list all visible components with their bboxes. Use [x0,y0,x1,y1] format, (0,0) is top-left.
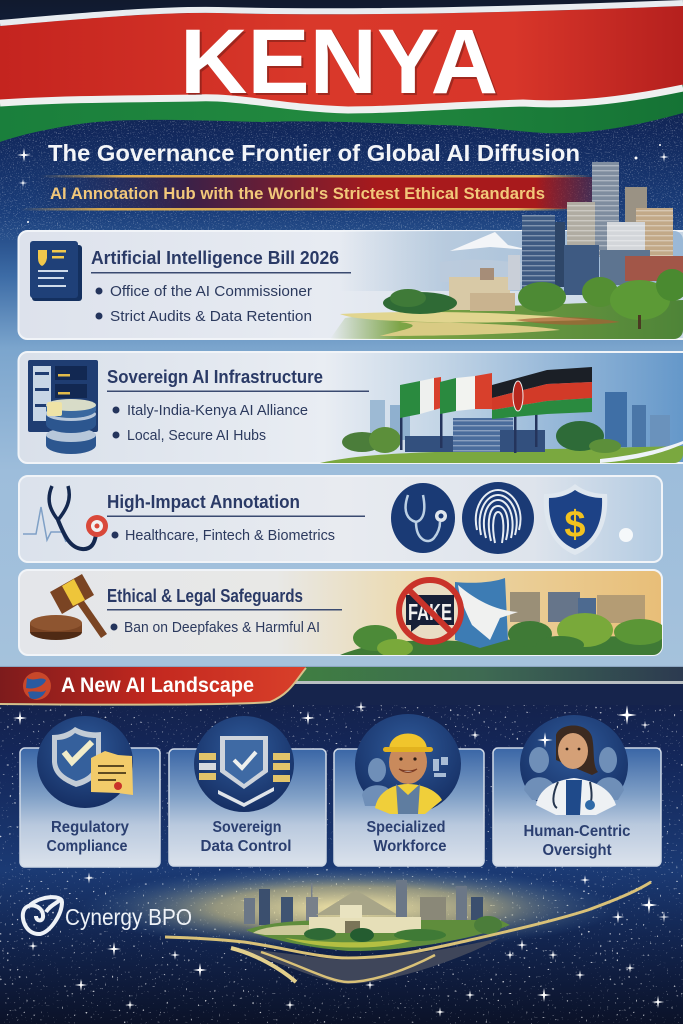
label [366,819,447,855]
icon: server and database [28,360,98,454]
title: KENYA [180,11,498,113]
bullet list: Local, Secure AI Hubs [127,427,266,444]
icon: shield and certificate [37,716,133,808]
skyline [244,880,483,925]
icon: no fake [399,580,461,642]
icon: torn shield [455,578,518,648]
subtitle: The Governance Frontier of Global AI Diffusion [48,140,580,166]
label [200,819,292,855]
card: Regulatory Compliance [20,716,160,867]
horizon scene [80,866,651,984]
card: Sovereign Data Control [169,716,326,866]
icon: document [30,241,82,301]
scene: buildings and trees [340,592,666,657]
icon: doctor portrait [520,715,628,815]
panel: High-Impact Annotation [19,476,662,562]
icon: dollar shield: $ [564,504,586,546]
card: Specialized Workforce [334,714,484,866]
panel frame [19,570,662,655]
icon: fingerprint badge [462,482,534,554]
tagline ribbon [20,175,592,210]
icon: globe [23,672,51,700]
panel frame [19,476,662,562]
label: Regulatory [51,819,129,836]
flag banner [0,3,683,142]
label: Oversight [542,842,612,859]
panel: Artificial Intelligence Bill 2026 [18,162,683,339]
bullet list: Strict Audits & Data Retention [110,308,312,325]
label [46,819,129,855]
bullet text: Healthcare, Fintech & Biometrics [125,527,335,544]
logo text: Cynergy BPO [65,904,192,930]
icon: dollar shield [544,484,607,555]
section heading: A New AI Landscape [61,674,254,697]
label [524,823,631,859]
ground and trees [246,920,510,951]
road curves [165,882,651,982]
icon: worker portrait [355,714,461,814]
panel: Sovereign AI Infrastructure [18,352,683,463]
label: Sovereign [212,819,282,836]
heading: Artificial Intelligence Bill 2026 [91,248,339,268]
icon: gavel [30,574,107,640]
title: KENYA [182,13,500,115]
heading: Sovereign AI Infrastructure [107,367,323,387]
logo mark [23,897,62,934]
flags [400,367,592,453]
label: Data Control [200,838,292,855]
logo: Cynergy BPO [23,897,192,934]
label: Specialized [366,819,446,836]
decorative stars upper [17,144,669,223]
skyline and ground [320,392,683,463]
bullet list: Italy-India-Kenya AI Alliance [127,402,308,419]
stars lower [13,701,670,1017]
bullet text: Ban on Deepfakes & Harmful AI [124,619,320,636]
landscape scene [330,231,683,339]
heading: Ethical & Legal Safeguards [107,586,303,606]
icon: no fake: FAKE [408,599,452,625]
government building [253,905,502,942]
panel: Ethical & Legal Safeguards [19,570,666,657]
icon: stethoscope with pulse [23,486,108,549]
tagline ribbon: AI Annotation Hub with the World's Strictest Ethical Standards [50,184,545,203]
bullet list [112,402,308,444]
city buildings [508,162,683,295]
panel frame [18,231,683,339]
label: Human-Centric [524,823,631,840]
heading: High-Impact Annotation [107,492,300,512]
label: Compliance [46,838,128,855]
panel frame [18,352,683,463]
road surface [231,938,500,984]
label: Workforce [374,838,447,855]
trees [383,269,683,329]
card: Human-Centric Oversight [493,715,661,866]
section band: A New AI Landscape [0,667,683,705]
icon: data shield [194,716,294,812]
bullet list: Office of the AI Commissioner [110,283,312,300]
bullet list [96,283,312,325]
icon: stethoscope badge [391,483,455,553]
